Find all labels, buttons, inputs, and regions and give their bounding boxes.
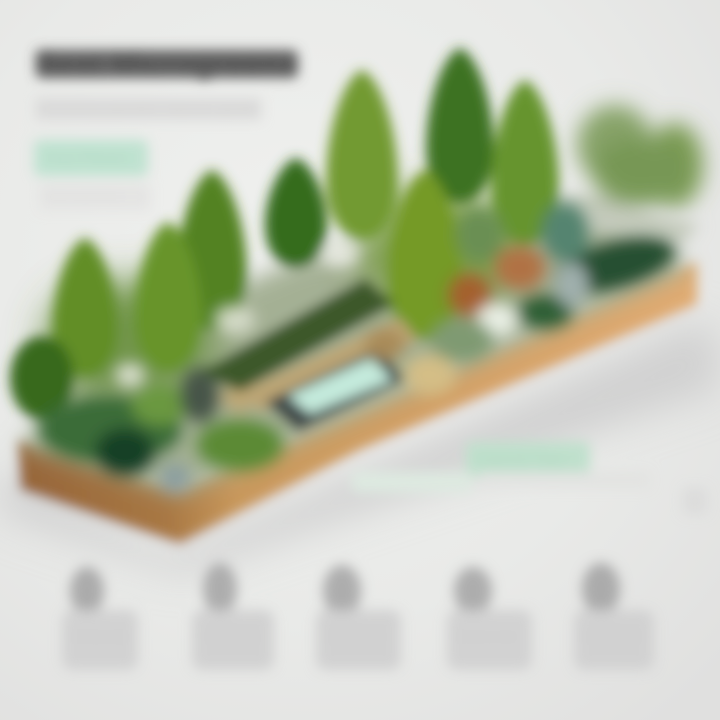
tree bbox=[177, 170, 247, 330]
white path bbox=[545, 195, 700, 245]
step column 3: Water feature bbox=[320, 631, 386, 643]
green callout label bbox=[466, 442, 590, 476]
green callout label: Layout Tips bbox=[476, 452, 566, 469]
planting rows bbox=[200, 278, 418, 412]
callout text bbox=[352, 472, 707, 514]
green label: Key Plants bbox=[46, 150, 128, 167]
step column 4 bbox=[447, 567, 532, 670]
tree bbox=[265, 158, 327, 268]
right garden beds bbox=[365, 202, 681, 395]
tree bbox=[491, 80, 559, 245]
tree bbox=[326, 70, 398, 240]
title: Best Microgreens bbox=[34, 45, 298, 81]
step column 4: Ground cover bbox=[451, 631, 518, 643]
subtitle: Growing garden layout guide bbox=[36, 100, 261, 116]
garden bed illustration bbox=[0, 48, 720, 575]
step column 3 bbox=[316, 565, 401, 670]
step columns bbox=[62, 563, 654, 670]
bed top surface bbox=[20, 195, 690, 495]
water pond bbox=[265, 348, 405, 432]
step column 2: Tree planting bbox=[196, 631, 260, 643]
back foliage bbox=[577, 105, 703, 207]
tree bbox=[426, 48, 494, 203]
wooden bed base bbox=[18, 262, 697, 544]
intro text bbox=[40, 184, 150, 210]
step column 5: Seasonal care bbox=[578, 631, 648, 643]
tree bbox=[52, 238, 118, 378]
bush left bbox=[10, 336, 74, 420]
tree group bbox=[10, 48, 559, 420]
tree bbox=[387, 170, 463, 340]
step column 2 bbox=[192, 563, 274, 670]
tree haze bbox=[45, 190, 520, 400]
front plants bbox=[38, 243, 358, 492]
subtitle bbox=[36, 98, 261, 120]
bed shadow bbox=[0, 320, 720, 575]
step column 5 bbox=[574, 563, 654, 670]
step column 1 bbox=[62, 567, 138, 670]
green label bbox=[34, 140, 148, 176]
intro text: Plant spacing bbox=[40, 188, 118, 203]
step column 1: Soil bed prep bbox=[66, 631, 131, 643]
tree bbox=[134, 222, 202, 372]
